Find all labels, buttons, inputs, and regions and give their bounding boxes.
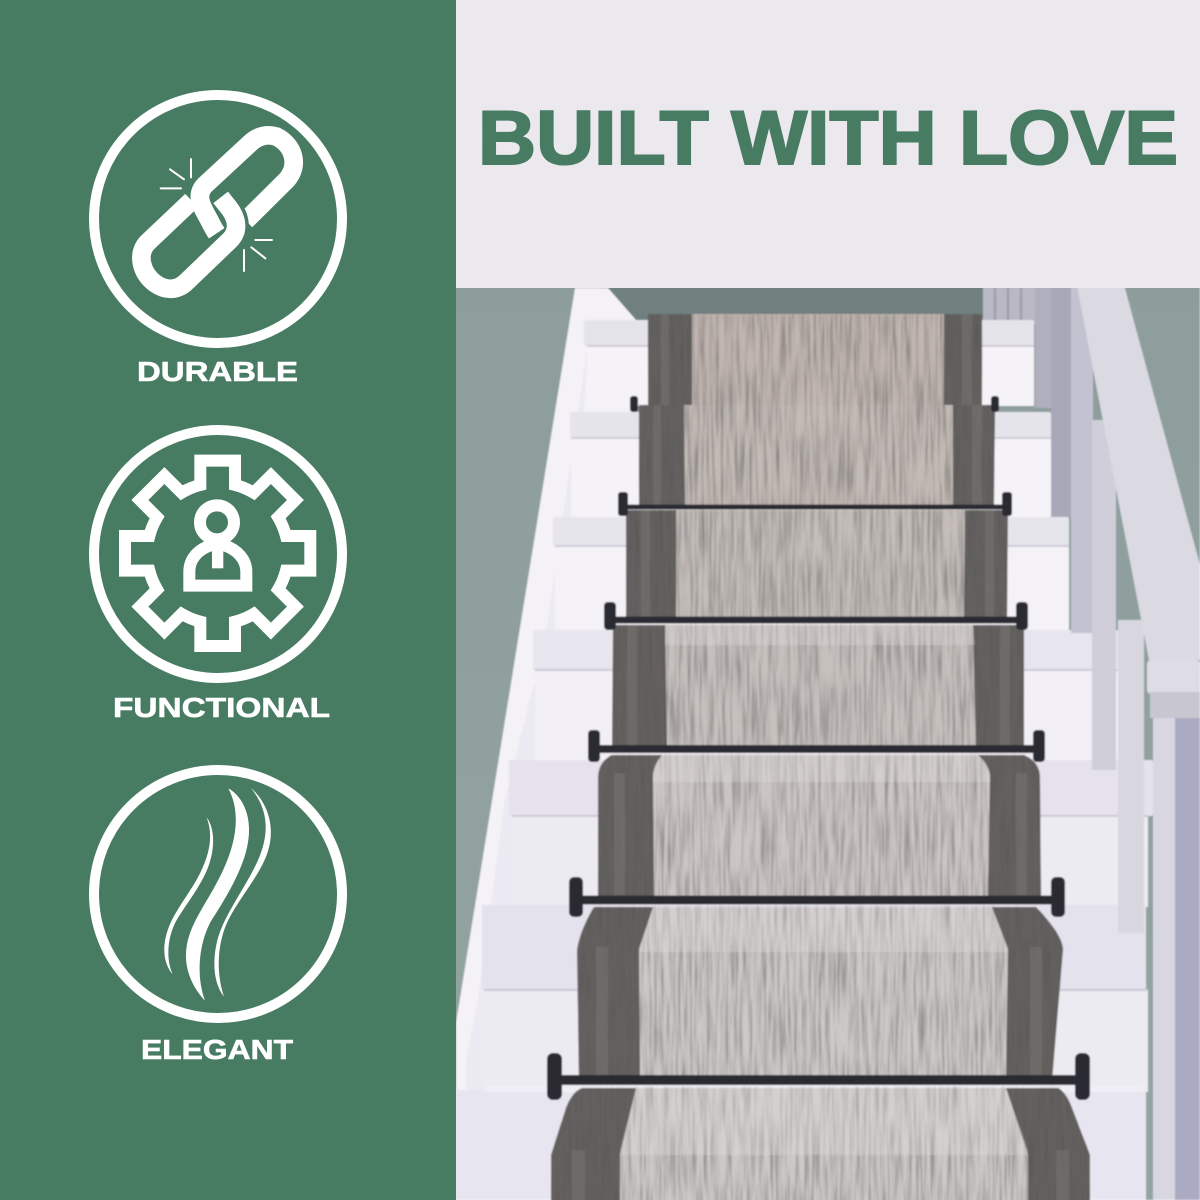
label: elegant: ELEGANT bbox=[141, 1034, 293, 1065]
title: BUILT WITH LOVE bbox=[478, 96, 1178, 181]
icon: functional gear with person bbox=[94, 430, 342, 678]
stair runner border stripes bbox=[572, 314, 1069, 1200]
panel: staircase illustration bbox=[440, 270, 1200, 1200]
label: functional: FUNCTIONAL bbox=[113, 692, 330, 723]
runner tread highlights bbox=[620, 625, 1028, 1155]
stair rods bbox=[547, 396, 1090, 1100]
panel: green sidebar bbox=[0, 0, 456, 1200]
label: durable: DURABLE bbox=[137, 356, 298, 387]
stair runner centre panels bbox=[620, 314, 1028, 1200]
icon: elegant waves bbox=[94, 770, 342, 1018]
icon: durable chain link bbox=[94, 95, 342, 343]
panel: title background bbox=[456, 0, 1200, 288]
balusters and handrail bbox=[1051, 270, 1200, 1200]
stair runner borders bbox=[551, 314, 1090, 1200]
stair treads and risers bbox=[440, 320, 1153, 1200]
